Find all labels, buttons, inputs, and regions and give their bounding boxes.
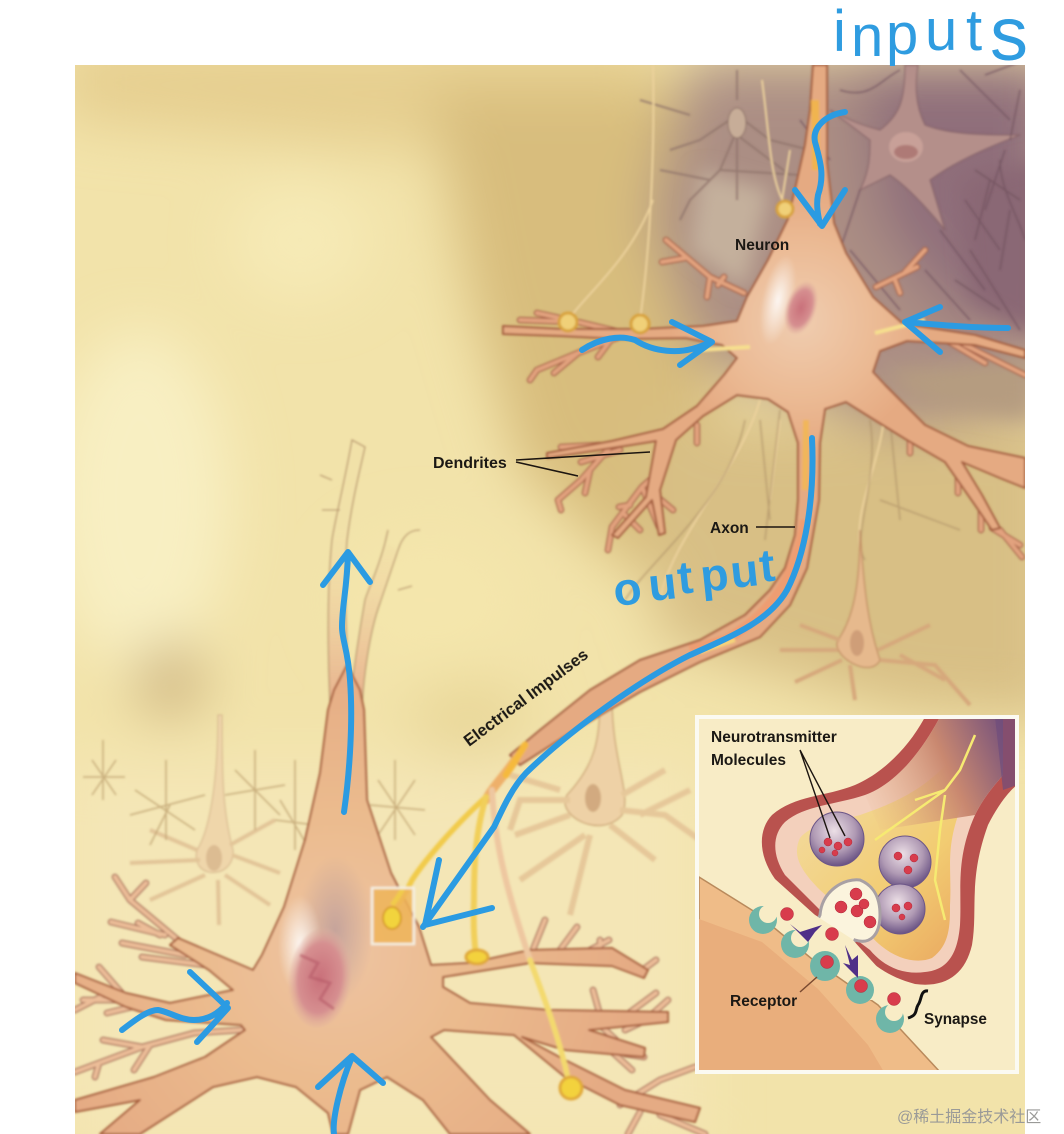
- blue annotation: right input arrow: [905, 307, 1008, 352]
- lower neuron: fine dendrites: [75, 877, 705, 1134]
- inset label: Neurotransmitter Molecules: [711, 729, 845, 838]
- postsynaptic membrane: [699, 877, 940, 1072]
- receptors: [749, 905, 904, 1033]
- axon terminal bulb: [762, 717, 1017, 985]
- blue annotation: inputs handwriting: i: [833, 0, 846, 64]
- release pocket and cleft: [815, 880, 880, 950]
- inset label: Synapse: Synapse: [924, 1011, 987, 1028]
- yellow terminal axon branches: [392, 745, 569, 1083]
- upper neuron: fine dendrites: [520, 240, 1025, 557]
- upper neuron: nucleus and highlights: [690, 100, 925, 652]
- blue annotation: top input arrow: [795, 112, 845, 226]
- synaptic vesicles: [810, 812, 931, 934]
- background neuron: left: [130, 715, 280, 925]
- thin axon fibres: [568, 65, 885, 600]
- labels on illustration: [433, 237, 795, 750]
- background neuron: lower right: [780, 530, 970, 705]
- blue annotation: inputs handwriting: p: [886, 2, 918, 67]
- blue annotation: output handwriting: output: [611, 539, 777, 616]
- lower neuron: apical dendrites: [319, 438, 420, 702]
- label: Electrical Impulses: Electrical Impulses: [460, 645, 592, 750]
- background neuron: top right: [640, 60, 1025, 330]
- inset label: Neurotransmitter Molecules: Molecules: [711, 752, 786, 769]
- highlight box on synapse: [372, 888, 414, 944]
- blue annotation: lower left input arrow: [122, 972, 228, 1042]
- inset label: Receptor: [730, 977, 817, 1010]
- blue annotation: bottom input arrow: [318, 1056, 383, 1134]
- blue annotation: axon output line and arrow: [423, 438, 813, 927]
- blue annotation: upward arrow: [323, 552, 370, 812]
- label: Dendrites: [433, 452, 650, 476]
- yellow synaptic terminals: upper: [559, 201, 793, 333]
- yellow axon terminals: lower: [466, 950, 582, 1099]
- lower neuron: nucleus and highlights: [280, 872, 364, 1024]
- watermark: @稀土掘金技术社区: [897, 1108, 1041, 1126]
- blue annotation: left input arrow: [582, 322, 712, 365]
- label: Axon: Axon: [710, 520, 749, 537]
- action potential lightning: [875, 735, 975, 920]
- background neuron: centre: [510, 700, 700, 915]
- label: Neuron: Neuron: [735, 237, 789, 254]
- upper neuron: body, axon and trunks: [503, 65, 1025, 765]
- inset label: Receptor: Receptor: [730, 993, 797, 1010]
- neurotransmitter molecules: [780, 838, 918, 1006]
- inset label: Neurotransmitter Molecules: Neurotransmitter: [711, 729, 837, 746]
- inset panel: synapse detail: [697, 717, 1017, 1072]
- inset label: Synapse: [908, 991, 987, 1028]
- label: Axon: [710, 520, 795, 537]
- lower neuron: body and trunks: [75, 665, 700, 1134]
- small distant neurons: [83, 740, 425, 850]
- blue annotation: inputs handwriting: n: [851, 4, 883, 69]
- neurotransmitter arrows: [790, 924, 822, 942]
- label: Dendrites: Dendrites: [433, 455, 507, 472]
